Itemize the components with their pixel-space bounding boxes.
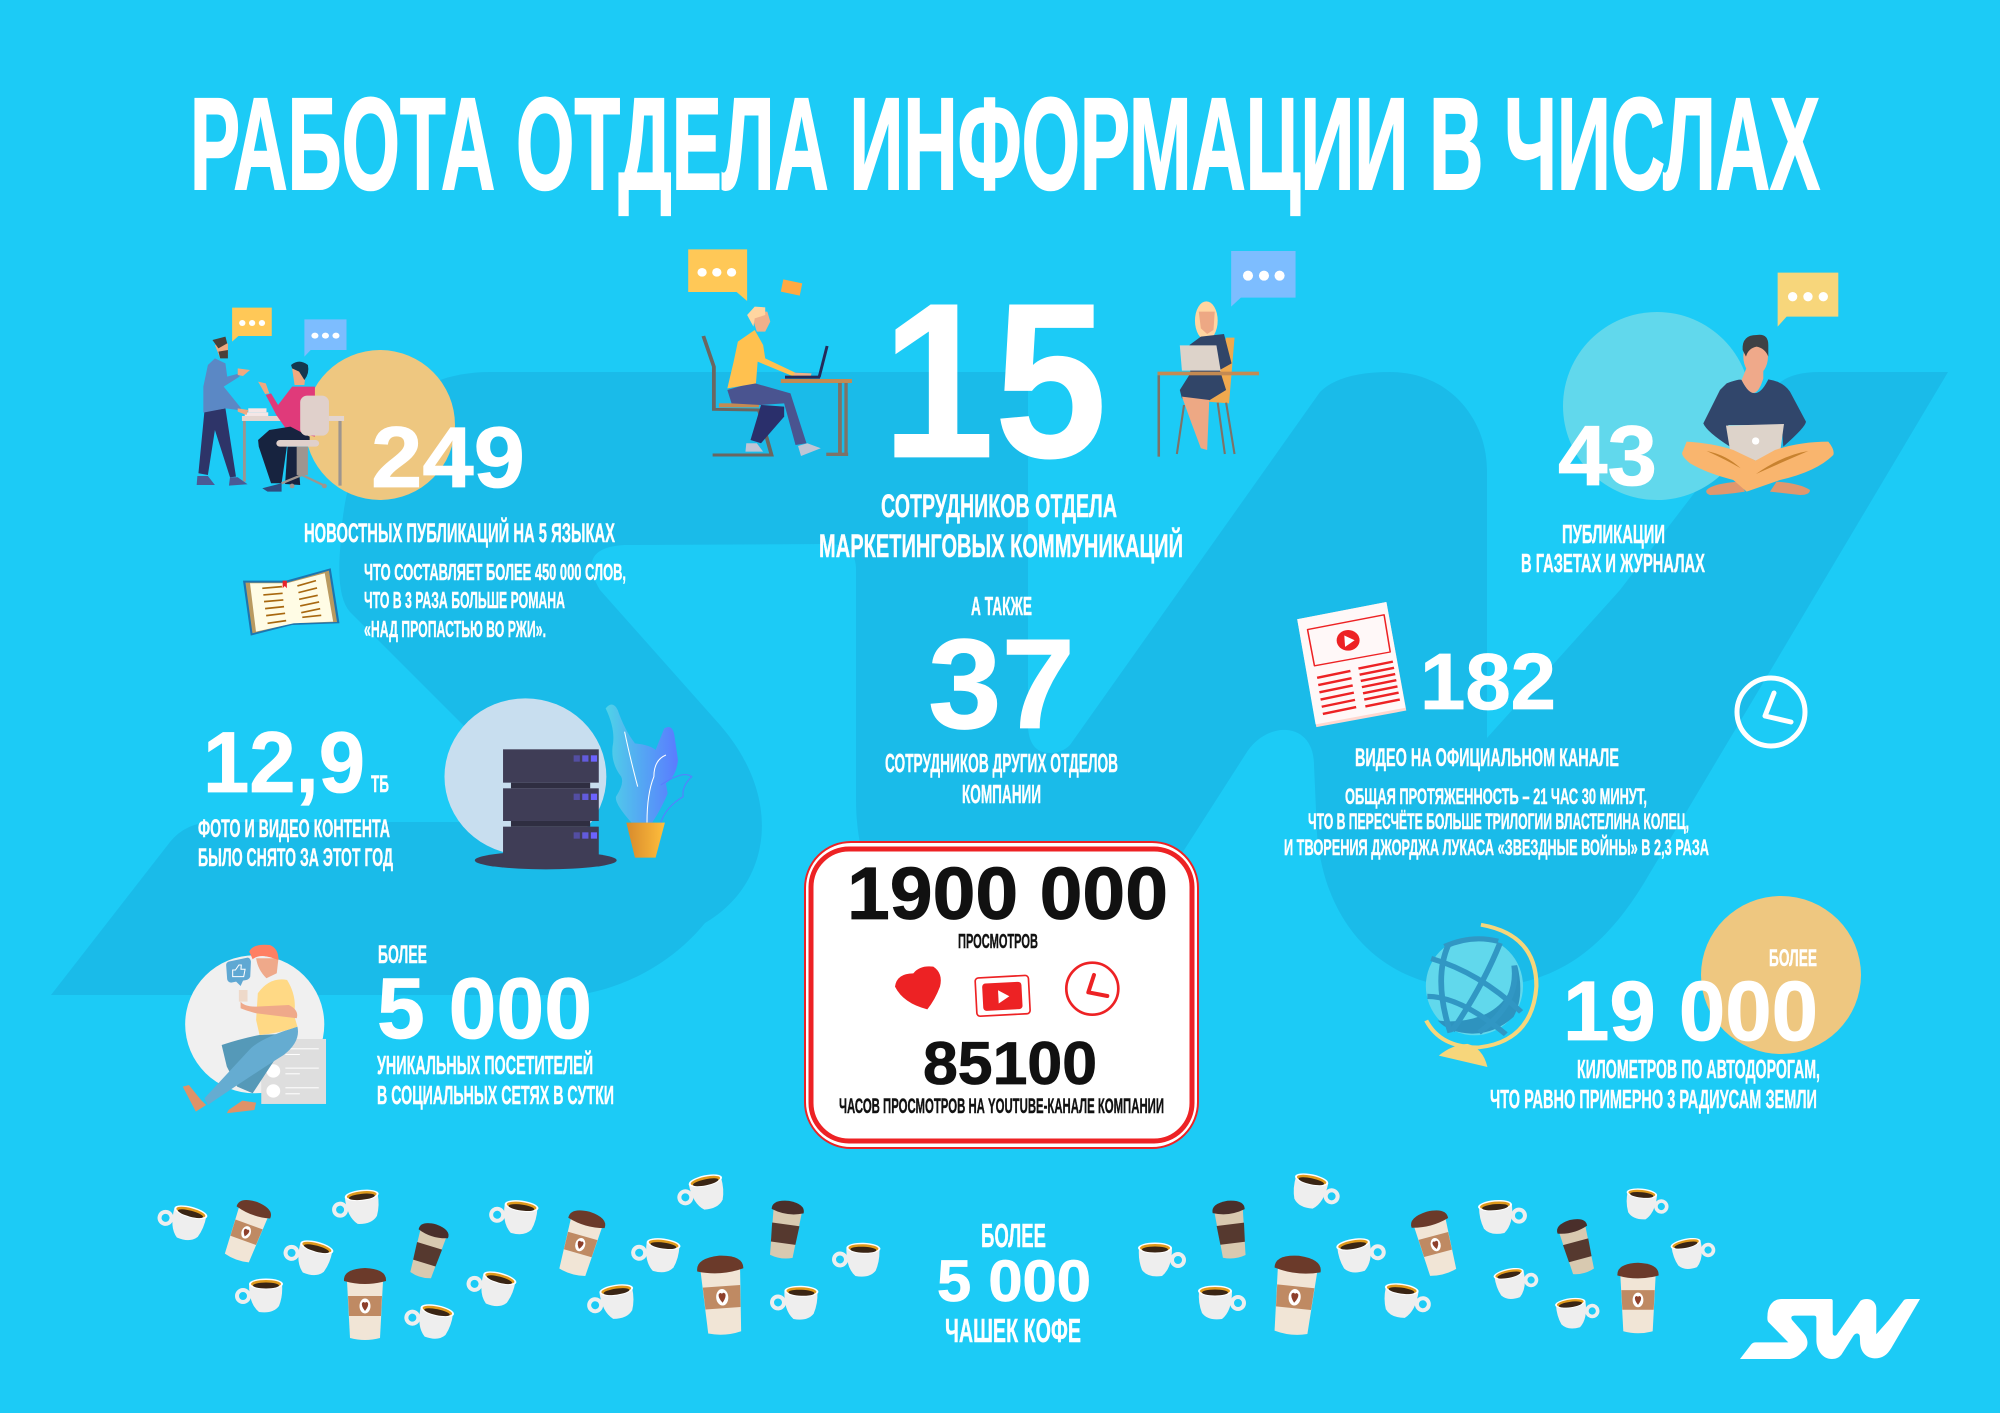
icon: red clock — [1066, 963, 1118, 1015]
caption: БЫЛО СНЯТО ЗА ЭТОТ ГОД — [198, 844, 393, 872]
number: 182 — [1420, 637, 1556, 726]
icon: woman at a laptop — [1158, 251, 1296, 457]
circle behind number — [1563, 312, 1751, 500]
icon: globe — [1426, 925, 1536, 1067]
coffee statistic: 5 000 — [937, 1249, 1091, 1314]
panel: 43 publications — [1521, 273, 1838, 578]
icon: open book — [243, 568, 339, 636]
also label: А ТАКЖЕ — [971, 591, 1032, 621]
icon: person with a phone and like bubble — [183, 945, 326, 1113]
icon: man at a laptop — [688, 249, 852, 456]
hours number: 85100 — [923, 1030, 1097, 1097]
number: 5 000 — [377, 961, 592, 1057]
card frame — [805, 842, 1198, 1148]
caption: СОТРУДНИКОВ ДРУГИХ ОТДЕЛОВ — [885, 748, 1118, 778]
note: ЧТО СОСТАВЛЯЕТ БОЛЕЕ 450 000 СЛОВ, — [364, 559, 626, 585]
caption: В ГАЗЕТАХ И ЖУРНАЛАХ — [1521, 548, 1705, 578]
caption: ВИДЕО НА ОФИЦИАЛЬНОМ КАНАЛЕ — [1355, 744, 1619, 772]
panel: 19000 km — [1426, 896, 1861, 1114]
views caption: ПРОСМОТРОВ — [958, 931, 1038, 953]
coffee statistic — [937, 1217, 1091, 1349]
large SW watermark logo — [51, 372, 1948, 995]
note — [1284, 784, 1709, 860]
more label: БОЛЕЕ — [1769, 945, 1817, 972]
number: 43 — [1558, 409, 1657, 504]
icon: newspaper with video — [1297, 602, 1406, 727]
icon: two people talking at a desk — [197, 308, 347, 492]
icon: man with laptop cross-legged — [1682, 273, 1838, 495]
note — [364, 559, 626, 642]
note: ОБЩАЯ ПРОТЯЖЕННОСТЬ – 21 ЧАС 30 МИНУТ, — [1345, 784, 1647, 809]
caption — [1490, 1054, 1820, 1114]
hours caption: ЧАСОВ ПРОСМОТРОВ НА YOUTUBE-КАНАЛЕ КОМПАНИИ — [839, 1095, 1164, 1118]
number: 19 000 — [1563, 964, 1818, 1058]
panel: 249 publications — [197, 308, 626, 642]
note: «НАД ПРОПАСТЬЮ ВО РЖИ». — [364, 616, 546, 642]
unit: ТБ — [371, 771, 389, 798]
note: И ТВОРЕНИЯ ДЖОРДЖА ЛУКАСА «ЗВЕЗДНЫЕ ВОЙНЫ» В 2,3 РАЗА — [1284, 835, 1709, 860]
caption — [377, 1050, 614, 1110]
caption: МАРКЕТИНГОВЫХ КОММУНИКАЦИЙ — [819, 528, 1183, 564]
coffee cups: left group — [156, 1172, 881, 1342]
panel: 15 staff — [688, 249, 1296, 564]
icon: clock — [1737, 678, 1805, 746]
circle behind number — [305, 350, 455, 500]
coffee cups: right group — [1138, 1171, 1716, 1337]
caption: ФОТО И ВИДЕО КОНТЕНТА — [198, 815, 390, 843]
caption — [1521, 519, 1705, 578]
caption: ПУБЛИКАЦИИ — [1562, 519, 1665, 549]
number: 15 — [882, 257, 1107, 504]
caption — [819, 488, 1183, 564]
icon: heart — [895, 966, 941, 1009]
coffee statistic: БОЛЕЕ — [981, 1217, 1046, 1254]
coffee statistic: ЧАШЕК КОФЕ — [945, 1312, 1081, 1349]
caption — [885, 748, 1118, 809]
caption: НОВОСТНЫХ ПУБЛИКАЦИЙ НА 5 ЯЗЫКАХ — [304, 517, 615, 548]
panel: 12,9 TB — [198, 698, 692, 872]
caption — [198, 815, 393, 872]
circle behind number — [1701, 896, 1861, 1054]
panel: 37 others — [885, 591, 1118, 809]
panel: 5000 visitors — [183, 941, 614, 1113]
panel: 182 videos — [1284, 602, 1805, 860]
icon: youtube frame — [975, 975, 1030, 1016]
icon: server with plant — [444, 698, 692, 869]
logo: SW — [1740, 1299, 1920, 1359]
caption: СОТРУДНИКОВ ОТДЕЛА — [881, 488, 1117, 524]
caption: В СОЦИАЛЬНЫХ СЕТЯХ В СУТКИ — [377, 1080, 614, 1110]
caption: УНИКАЛЬНЫХ ПОСЕТИТЕЛЕЙ — [377, 1050, 593, 1080]
panel: video statistics card — [805, 842, 1198, 1148]
caption: КОМПАНИИ — [962, 779, 1041, 809]
number: 37 — [928, 613, 1075, 756]
number: 12,9 — [203, 715, 365, 811]
note: ЧТО В 3 РАЗА БОЛЬШЕ РОМАНА — [364, 587, 565, 613]
views number: 1900 000 — [847, 852, 1168, 935]
note: ЧТО В ПЕРЕСЧЁТЕ БОЛЬШЕ ТРИЛОГИИ ВЛАСТЕЛИНА КОЛЕЦ, — [1308, 809, 1689, 834]
number: 249 — [371, 410, 525, 506]
more label: БОЛЕЕ — [378, 941, 427, 969]
